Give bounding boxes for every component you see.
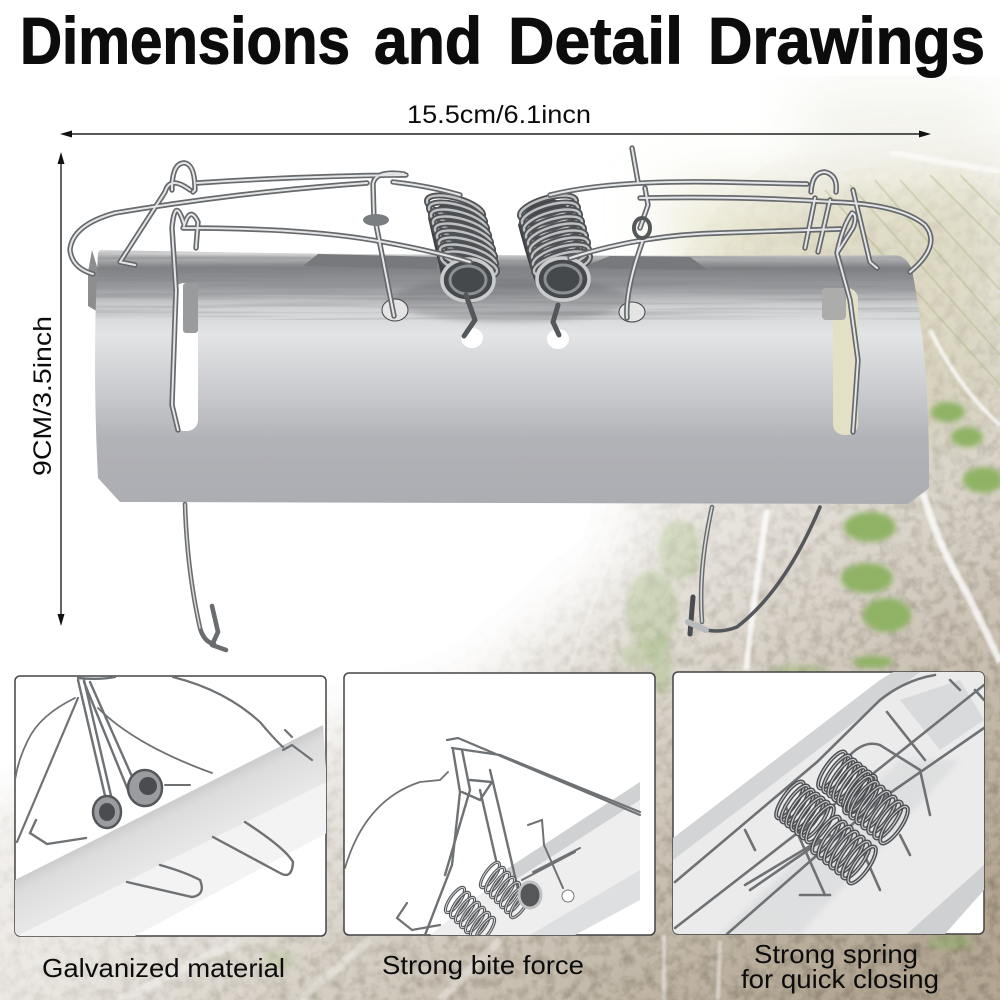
panel 2 springs [444, 860, 574, 935]
trap metal plate [90, 250, 935, 504]
trap side tabs [88, 250, 98, 312]
caption: strong spring for quick closing: for quick closing [741, 964, 939, 994]
title: Drawings [708, 4, 985, 78]
panel 1 wires [15, 677, 312, 897]
panel: galvanized material photo [15, 676, 327, 937]
caption: galvanized material: Galvanized material [42, 953, 285, 983]
knot on right pin [634, 218, 650, 238]
main product: mole trap [70, 148, 935, 650]
panel 3 coil springs [772, 748, 912, 887]
title: Dimensions [20, 4, 350, 78]
title [20, 4, 985, 78]
height dimension label: 9CM/3.5inch [29, 316, 57, 476]
lower right wire [688, 507, 820, 634]
plate slots and holes [173, 254, 858, 435]
panel 3 wires [675, 675, 984, 934]
height dimension arrow [58, 152, 64, 626]
panel 3 metal plate [673, 672, 984, 934]
caption: strong spring for quick closing: Strong spring [754, 939, 918, 969]
right wire jaws [550, 148, 931, 432]
knot on left pin [363, 214, 389, 226]
panel 2 metal plate [430, 782, 640, 935]
lower left wire [185, 504, 226, 650]
panel 2 wires [345, 738, 640, 935]
left wire jaws [70, 163, 470, 430]
caption: strong spring for quick closing [741, 939, 939, 994]
width dimension arrow [60, 130, 931, 138]
caption: strong bite force: Strong bite force [382, 950, 584, 980]
spring tails [464, 295, 559, 336]
panel 1 springs [93, 770, 162, 828]
panel: strong bite force photo [344, 673, 655, 945]
panel: strong spring photo [673, 672, 984, 934]
title: and [374, 4, 482, 78]
right coil spring [517, 190, 593, 300]
left coil spring [424, 190, 500, 304]
panel 1 metal plate [15, 725, 327, 937]
width dimension label: 15.5cm/6.1incn [407, 101, 591, 129]
title: Detail [508, 4, 683, 78]
